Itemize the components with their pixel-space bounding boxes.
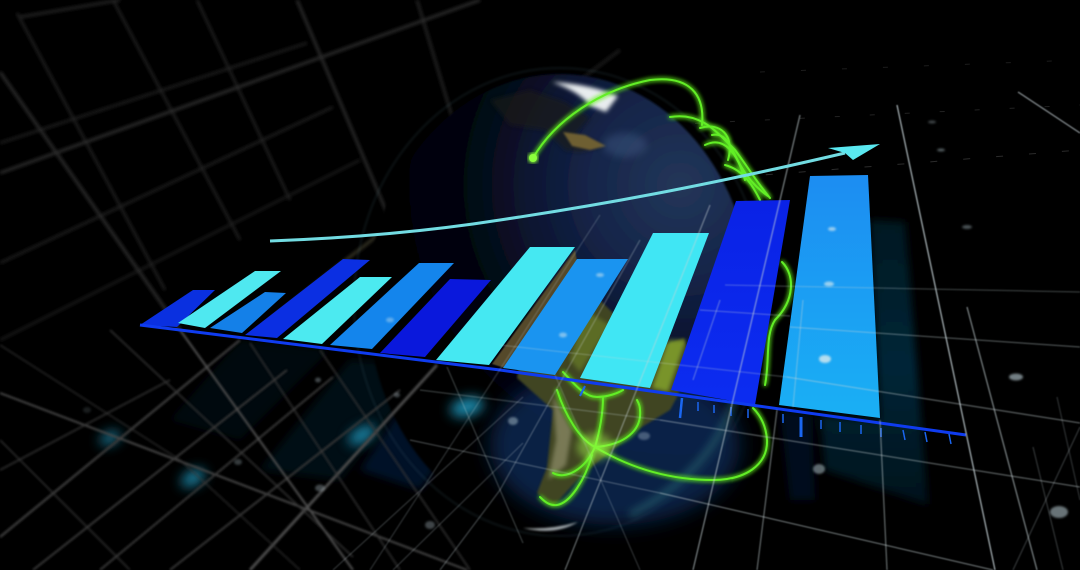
land strip between bars xyxy=(492,250,577,368)
south america xyxy=(517,262,690,507)
bar 7 xyxy=(380,279,491,357)
bar 4 xyxy=(245,259,370,338)
green network arcs xyxy=(533,79,791,505)
green arc endpoint xyxy=(529,154,537,162)
bar 12 xyxy=(779,175,880,418)
arrow head xyxy=(828,144,880,160)
north america xyxy=(490,90,605,152)
north america lit coast xyxy=(563,132,606,150)
bar 9 xyxy=(503,259,628,375)
glowing dots xyxy=(83,120,1068,529)
near grid lines xyxy=(333,92,1080,570)
bottom ice crescent xyxy=(523,522,578,531)
far grid lines xyxy=(0,0,620,340)
bar 3 xyxy=(210,292,286,333)
growth arrow xyxy=(270,144,880,241)
axis line xyxy=(140,325,966,435)
globe sphere xyxy=(368,74,752,530)
bar 10 xyxy=(580,233,709,388)
axis ticks xyxy=(580,386,951,444)
southern ocean xyxy=(490,365,740,525)
limb glow xyxy=(630,395,735,515)
lower left floor grid xyxy=(0,330,470,570)
cloud band xyxy=(603,133,647,157)
globe halo xyxy=(354,68,766,536)
globe xyxy=(354,68,766,536)
cyan floor glow spots xyxy=(97,394,486,491)
bar 1 xyxy=(140,290,215,327)
bar chart xyxy=(140,175,966,444)
right distant dotted grid xyxy=(660,60,1080,180)
andes highlights xyxy=(548,395,572,480)
arrow shaft xyxy=(270,153,845,241)
bar 6 xyxy=(330,263,454,349)
bar 11 xyxy=(671,200,790,405)
glow on land behind bars xyxy=(570,310,686,392)
bar 8 xyxy=(436,247,575,365)
polar ice cap xyxy=(552,82,618,112)
bar 2 xyxy=(178,271,281,328)
green hub glow xyxy=(577,433,613,461)
bar 5 xyxy=(283,277,392,344)
floor shadow of bars xyxy=(170,220,928,505)
